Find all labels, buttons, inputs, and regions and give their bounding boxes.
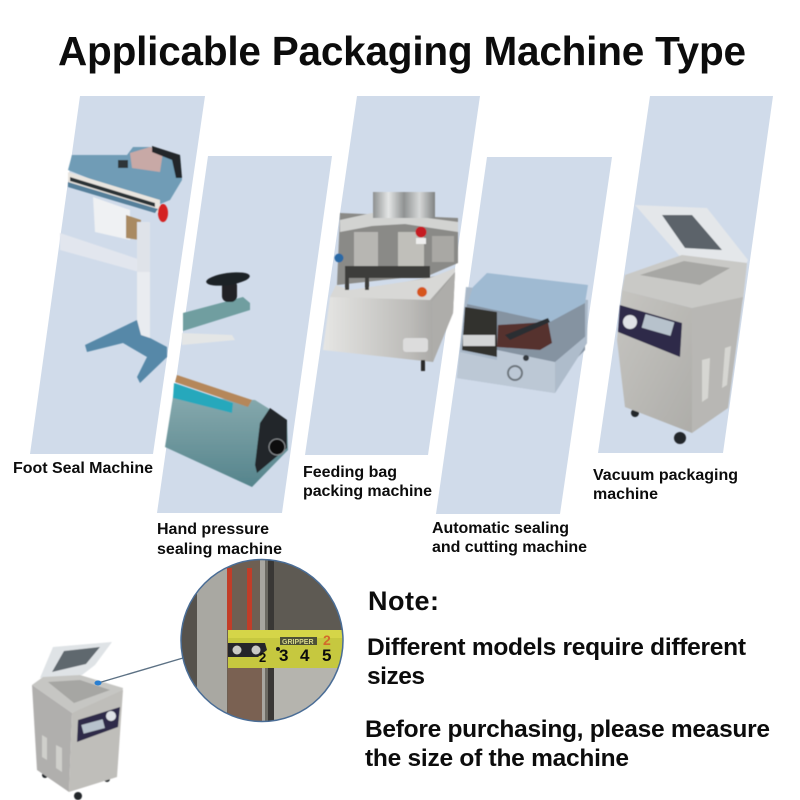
text block: sizes note: sizes (367, 663, 425, 690)
label: hand pressure sealing machine (157, 521, 282, 558)
label: vacuum packaging machine: Vacuum packaging (593, 467, 738, 484)
panel: foot seal machine (30, 96, 205, 454)
label: automatic sealing and cutting machine (432, 520, 587, 556)
title: Applicable Packaging Machine Type (58, 28, 746, 74)
label: feeding bag packing machine (303, 464, 432, 500)
label: hand pressure sealing machine: sealing machine (157, 541, 282, 558)
heading: note: Note: (368, 586, 439, 616)
icon: small vacuum machine (32, 642, 123, 800)
text block: sizes note (367, 634, 746, 690)
label: automatic sealing and cutting machine: Automatic sealing (432, 520, 569, 537)
text block: sizes note: Different models require different (367, 634, 746, 661)
tape measure: 5 (322, 646, 331, 665)
label: feeding bag packing machine: Feeding bag (303, 464, 397, 481)
panel: vacuum packaging machine (598, 96, 773, 453)
tape measure (228, 630, 344, 668)
panel: hand pressure sealing machine (157, 156, 332, 513)
tape measure: 2 (323, 632, 331, 648)
icon: automatic sealing and cutting machine (457, 273, 588, 393)
panel: feeding bag packing machine (305, 96, 480, 455)
panel: automatic sealing and cutting machine (436, 157, 612, 514)
label: vacuum packaging machine: machine (593, 486, 658, 503)
tape measure: GRIPPER (282, 639, 314, 646)
tape measure: 2 (259, 650, 266, 665)
label: hand pressure sealing machine: Hand pressure (157, 521, 269, 538)
text block: measure note (365, 716, 770, 772)
tape measure: 4 (300, 646, 310, 665)
icon: vacuum packaging machine (617, 205, 748, 444)
label: feeding bag packing machine: packing machine (303, 483, 432, 500)
callout: connector line (94, 658, 183, 686)
text block: measure note: Before purchasing, please measure (365, 716, 770, 743)
label: vacuum packaging machine (593, 467, 738, 503)
icon: foot seal machine (60, 146, 182, 383)
label: foot seal machine: Foot Seal Machine (13, 460, 153, 477)
tape measure: 3 (279, 646, 288, 665)
icon: feeding bag packing machine (323, 192, 458, 371)
icon: hand pressure sealer (165, 270, 288, 487)
callout: magnified tape measure (181, 559, 344, 722)
label: automatic sealing and cutting machine: and cutting machine (432, 539, 587, 556)
text block: measure note: the size of the machine (365, 745, 629, 772)
